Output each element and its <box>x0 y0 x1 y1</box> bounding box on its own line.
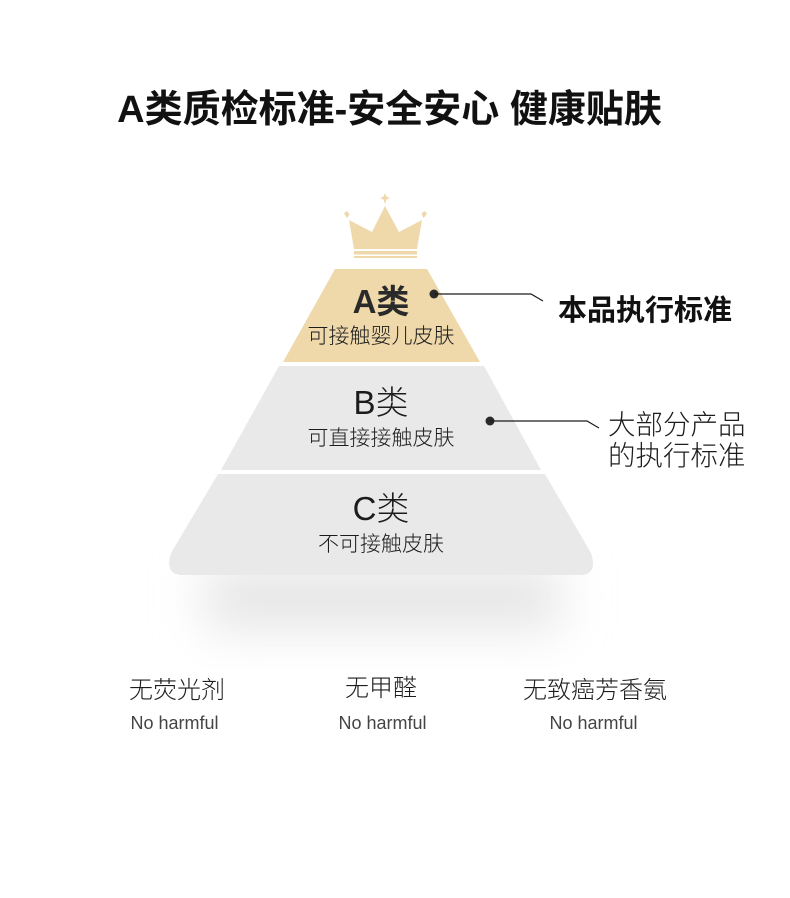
callout: B standard: 的执行标准 <box>608 440 746 471</box>
pyramid tier C: 不可接触皮肤 <box>318 533 444 556</box>
pyramid tier C: C类 <box>353 490 409 527</box>
pyramid tier A <box>283 269 480 362</box>
callout: B standard: 大部分产品 <box>608 409 746 440</box>
pyramid tier A: A类 <box>353 283 409 320</box>
pyramid tier B <box>221 366 541 470</box>
label: no formaldehyde <box>338 675 427 733</box>
title: A类质检标准-安全安心 健康贴肤 <box>117 89 662 131</box>
label: no formaldehyde: No harmful <box>338 713 427 733</box>
callout: A standard: 本品执行标准 <box>558 294 732 327</box>
label: no carcinogenic aromatic amines: No harmful <box>549 713 638 733</box>
label: no fluorescent agent: 无荧光剂 <box>129 677 225 704</box>
label: no carcinogenic aromatic amines <box>523 677 667 733</box>
label: no fluorescent agent <box>129 677 225 733</box>
callout: B standard <box>486 409 746 471</box>
pyramid tier A: 可接触婴儿皮肤 <box>308 325 454 348</box>
pyramid tier B: B类 <box>353 384 409 421</box>
callout: A standard <box>430 290 732 327</box>
label: no fluorescent agent: No harmful <box>130 713 219 733</box>
label: no formaldehyde: 无甲醛 <box>345 675 417 702</box>
pyramid shadow <box>205 565 560 630</box>
pyramid tier B: 可直接接触皮肤 <box>308 427 454 450</box>
icon: crown <box>344 193 427 258</box>
pyramid tier C <box>169 474 593 575</box>
label: no carcinogenic aromatic amines: 无致癌芳香氨 <box>523 677 667 704</box>
